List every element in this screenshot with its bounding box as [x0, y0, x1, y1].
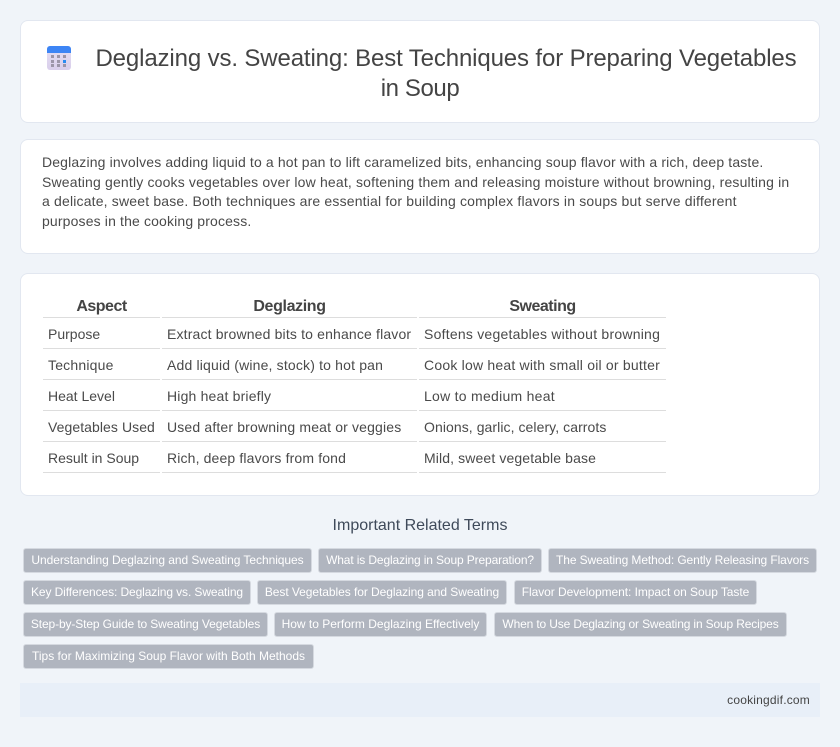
- intro text panel: [20, 139, 820, 254]
- header panel: [20, 20, 820, 123]
- row: purpose: Softens vegetables without browning: [424, 326, 660, 342]
- column headers: Sweating: [509, 298, 576, 315]
- row: result in soup: [48, 450, 596, 466]
- title: Deglazing vs. Sweating: Best Techniques for Preparing Vegetables: [95, 45, 796, 72]
- row: result in soup: Rich, deep flavors from fond: [167, 450, 346, 466]
- intro paragraph: [42, 154, 789, 229]
- row: purpose: [48, 326, 660, 342]
- comparison table panel: [20, 273, 820, 496]
- intro paragraph: purposes in the cooking process.: [42, 213, 251, 229]
- title: [95, 45, 796, 102]
- related terms heading: Important Related Terms: [333, 517, 507, 534]
- row: purpose: Extract browned bits to enhance flavor: [167, 326, 411, 342]
- comparison table: [43, 298, 666, 473]
- related terms tags: Tips for Maximizing Soup Flavor with Both Methods: [32, 649, 305, 663]
- row: technique: Cook low heat with small oil or butter: [424, 357, 660, 373]
- related terms tags: How to Perform Deglazing Effectively: [282, 617, 479, 631]
- intro paragraph: a delicate, sweet base. Both techniques are essential for building complex flavors in soups but serve different: [42, 193, 737, 209]
- intro paragraph: Sweating gently cooks vegetables over low heat, softening them and releasing moisture without browning, resulting in: [42, 174, 789, 190]
- intro paragraph: Deglazing involves adding liquid to a hot pan to lift caramelized bits, enhancing soup flavor with a rich, deep taste.: [42, 154, 763, 170]
- row: vegetables used: Onions, garlic, celery, carrots: [424, 419, 606, 435]
- column headers: [76, 298, 576, 315]
- column headers: Deglazing: [253, 298, 326, 315]
- footer bar: [20, 683, 820, 717]
- row: heat level: Low to medium heat: [424, 388, 555, 404]
- related terms tags: Flavor Development: Impact on Soup Taste: [522, 585, 749, 599]
- related terms tags: Understanding Deglazing and Sweating Techniques: [31, 553, 304, 567]
- row: heat level: Heat Level: [48, 388, 115, 404]
- related terms tags: The Sweating Method: Gently Releasing Flavors: [556, 553, 809, 567]
- row: heat level: High heat briefly: [167, 388, 271, 404]
- title: in Soup: [381, 75, 459, 102]
- row: vegetables used: Vegetables Used: [48, 419, 155, 435]
- related terms tags: Best Vegetables for Deglazing and Sweating: [265, 585, 499, 599]
- row: technique: [48, 357, 660, 373]
- column headers: Aspect: [76, 298, 127, 315]
- related terms tags: [23, 548, 817, 669]
- row: vegetables used: [48, 419, 606, 435]
- row: result in soup: Mild, sweet vegetable base: [424, 450, 596, 466]
- related terms tags: Key Differences: Deglazing vs. Sweating: [31, 585, 243, 599]
- related terms tags: When to Use Deglazing or Sweating in Soup Recipes: [502, 617, 779, 631]
- row: purpose: Purpose: [48, 326, 100, 342]
- row: result in soup: Result in Soup: [48, 450, 139, 466]
- row: technique: Technique: [48, 357, 114, 373]
- footer site name: cookingdif.com: [727, 693, 810, 707]
- row: vegetables used: Used after browning meat or veggies: [167, 419, 401, 435]
- icon: calendar: [47, 46, 71, 70]
- row: technique: Add liquid (wine, stock) to hot pan: [167, 357, 383, 373]
- row: heat level: [48, 388, 555, 404]
- related terms tags: Step-by-Step Guide to Sweating Vegetables: [31, 617, 260, 631]
- related terms tags: What is Deglazing in Soup Preparation?: [326, 553, 534, 567]
